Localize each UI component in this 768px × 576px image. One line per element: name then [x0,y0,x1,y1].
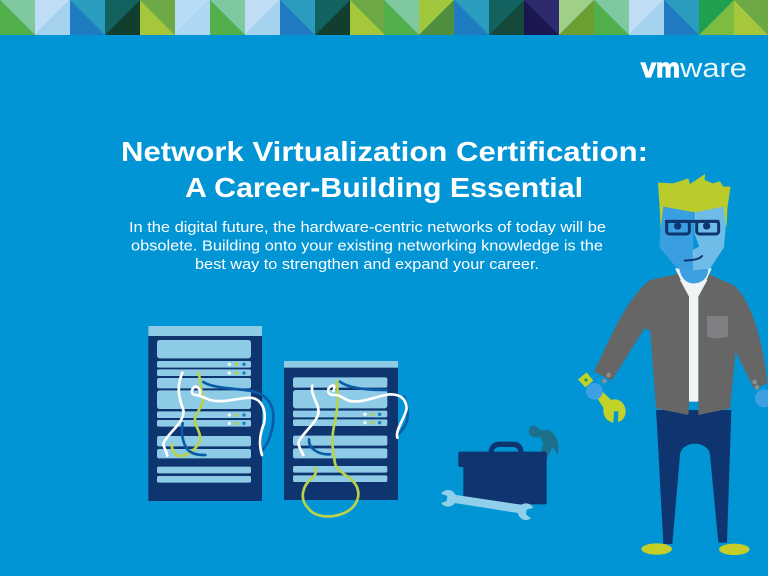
hair [658,174,731,228]
character: engineer [578,174,768,555]
icon: hammer [529,426,559,464]
icon: toolbox [458,442,547,504]
jacket [594,273,767,415]
intro paragraph: In the digital future, the hardware-centric networks of today will be [129,220,606,236]
banner: triangle pattern [0,0,768,35]
mouth [685,256,702,261]
intro paragraph: obsolete. Building onto your existing networking knowledge is the [131,238,603,254]
server rack: right [284,361,408,516]
pocket [707,316,728,338]
shirt [680,275,707,402]
intro paragraph [129,220,606,273]
server rack: left [148,326,273,501]
title: A Career-Building Essential [185,172,583,203]
icon: toolbox, hammer and wrench [437,426,559,520]
wrench in hand [578,372,626,423]
logo: vmware: ware [679,53,747,83]
icon: wrench [437,490,536,520]
shoes [641,543,750,555]
torso and arms [578,273,768,423]
glasses [665,221,719,234]
cuff buttons [602,373,759,390]
collar [675,268,712,292]
face [659,207,693,270]
neck [679,268,708,283]
logo: vmware: vm [641,53,680,83]
logo: vmware [641,53,747,83]
right hand [755,389,768,407]
title [121,136,648,203]
left hand [586,383,603,400]
title: Network Virtualization Certification: [121,136,648,167]
legs [641,410,750,555]
intro paragraph: best way to strengthen and expand your career. [195,257,539,273]
head [658,174,731,292]
